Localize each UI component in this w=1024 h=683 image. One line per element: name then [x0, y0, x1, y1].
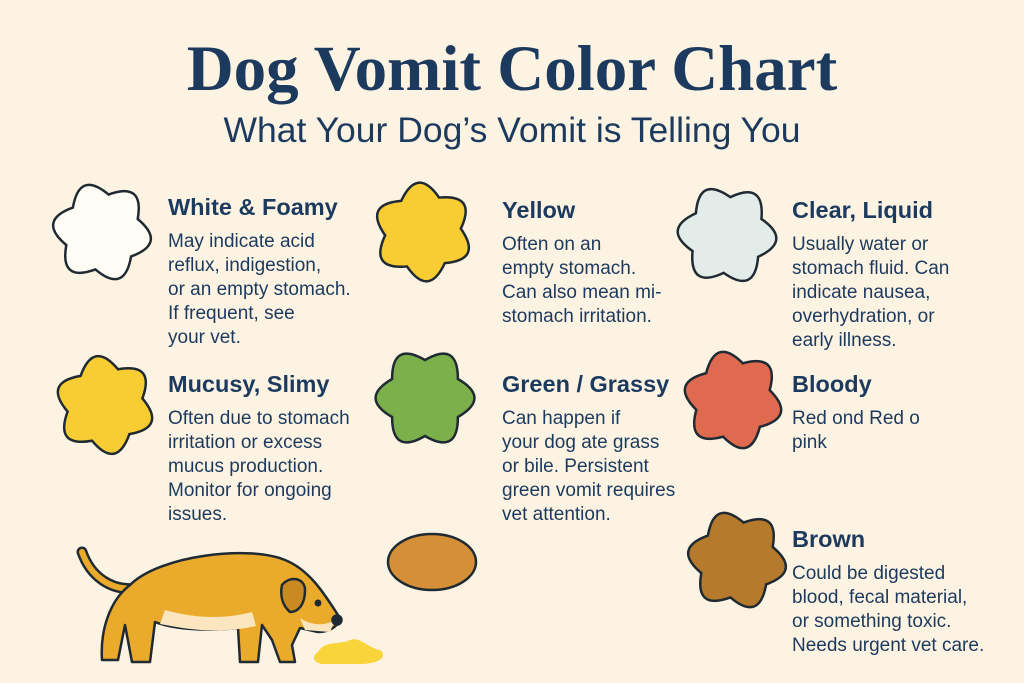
icon: green blob — [376, 354, 474, 442]
panel: clear liquid: indicate nausea, — [792, 282, 930, 303]
icon: brown blob — [681, 508, 793, 612]
icon: mucusy blob — [43, 346, 167, 464]
panel: clear liquid: stomach fluid. Can — [792, 258, 949, 279]
icon: clear blob — [674, 186, 780, 284]
panel: yellow: empty stomach. — [502, 258, 636, 279]
panel: yellow: Can also mean mi- — [502, 282, 661, 303]
icon: yellow blob — [359, 171, 487, 293]
panel: white & foamy: If frequent, see — [168, 303, 295, 324]
panel: green grassy: or bile. Persistent — [502, 456, 649, 477]
panel: yellow — [502, 197, 661, 327]
panel: brown: blood, fecal material, — [792, 587, 967, 608]
panel: mucusy slimy: Monitor for ongoing — [168, 480, 332, 501]
panel: mucusy slimy: Often due to stomach — [168, 408, 350, 429]
panel: clear liquid: Clear, Liquid — [792, 197, 933, 223]
panel: green grassy: Green / Grassy — [502, 371, 669, 397]
panel: yellow: stomach irritation. — [502, 306, 652, 327]
panel: white & foamy: reflux, indigestion, — [168, 255, 321, 276]
panel: mucusy slimy: Mucusy, Slimy — [168, 371, 330, 397]
panel: mucusy slimy: irritation or excess — [168, 432, 322, 453]
panel: green grassy — [502, 371, 675, 525]
panel: clear liquid: Usually water or — [792, 234, 928, 255]
panel: brown: Brown — [792, 526, 865, 552]
panel: brown: Could be digested — [792, 563, 945, 584]
panel: yellow: Often on an — [502, 234, 601, 255]
panel: green grassy: vet attention. — [502, 504, 611, 525]
panel: clear liquid: overhydration, or — [792, 306, 935, 327]
panel: brown: or something toxic. — [792, 611, 951, 632]
panel: bloody — [792, 371, 920, 453]
panel: bloody: pink — [792, 432, 827, 453]
panel: white & foamy: your vet. — [168, 327, 241, 348]
icon: white blob — [46, 180, 158, 284]
panel: bloody: Bloody — [792, 371, 872, 397]
panel: white & foamy: or an empty stomach. — [168, 279, 351, 300]
title: Dog Vomit Color Chart — [187, 33, 837, 105]
panel: green grassy: Can happen if — [502, 408, 620, 429]
panel: mucusy slimy: issues. — [168, 504, 227, 525]
icon: brown oval — [388, 534, 476, 590]
panel: green grassy: your dog ate grass — [502, 432, 659, 453]
panel: yellow: Yellow — [502, 197, 575, 223]
panel: bloody: Red ond Red o — [792, 408, 920, 429]
panel: mucusy slimy: mucus production. — [168, 456, 323, 477]
panel: clear liquid: early illness. — [792, 330, 897, 351]
panel: mucusy slimy — [168, 371, 350, 525]
subtitle: What Your Dog’s Vomit is Telling You — [224, 110, 800, 150]
panel: brown: Needs urgent vet care. — [792, 635, 984, 656]
panel: white & foamy — [168, 194, 351, 348]
icon: red blob — [674, 344, 792, 456]
panel: white & foamy: White & Foamy — [168, 194, 338, 220]
panel: green grassy: green vomit requires — [502, 480, 675, 501]
illustration: dog vomiting — [82, 552, 383, 664]
panel: white & foamy: May indicate acid — [168, 231, 315, 252]
panel: brown — [792, 526, 984, 656]
panel: clear liquid — [792, 197, 949, 351]
